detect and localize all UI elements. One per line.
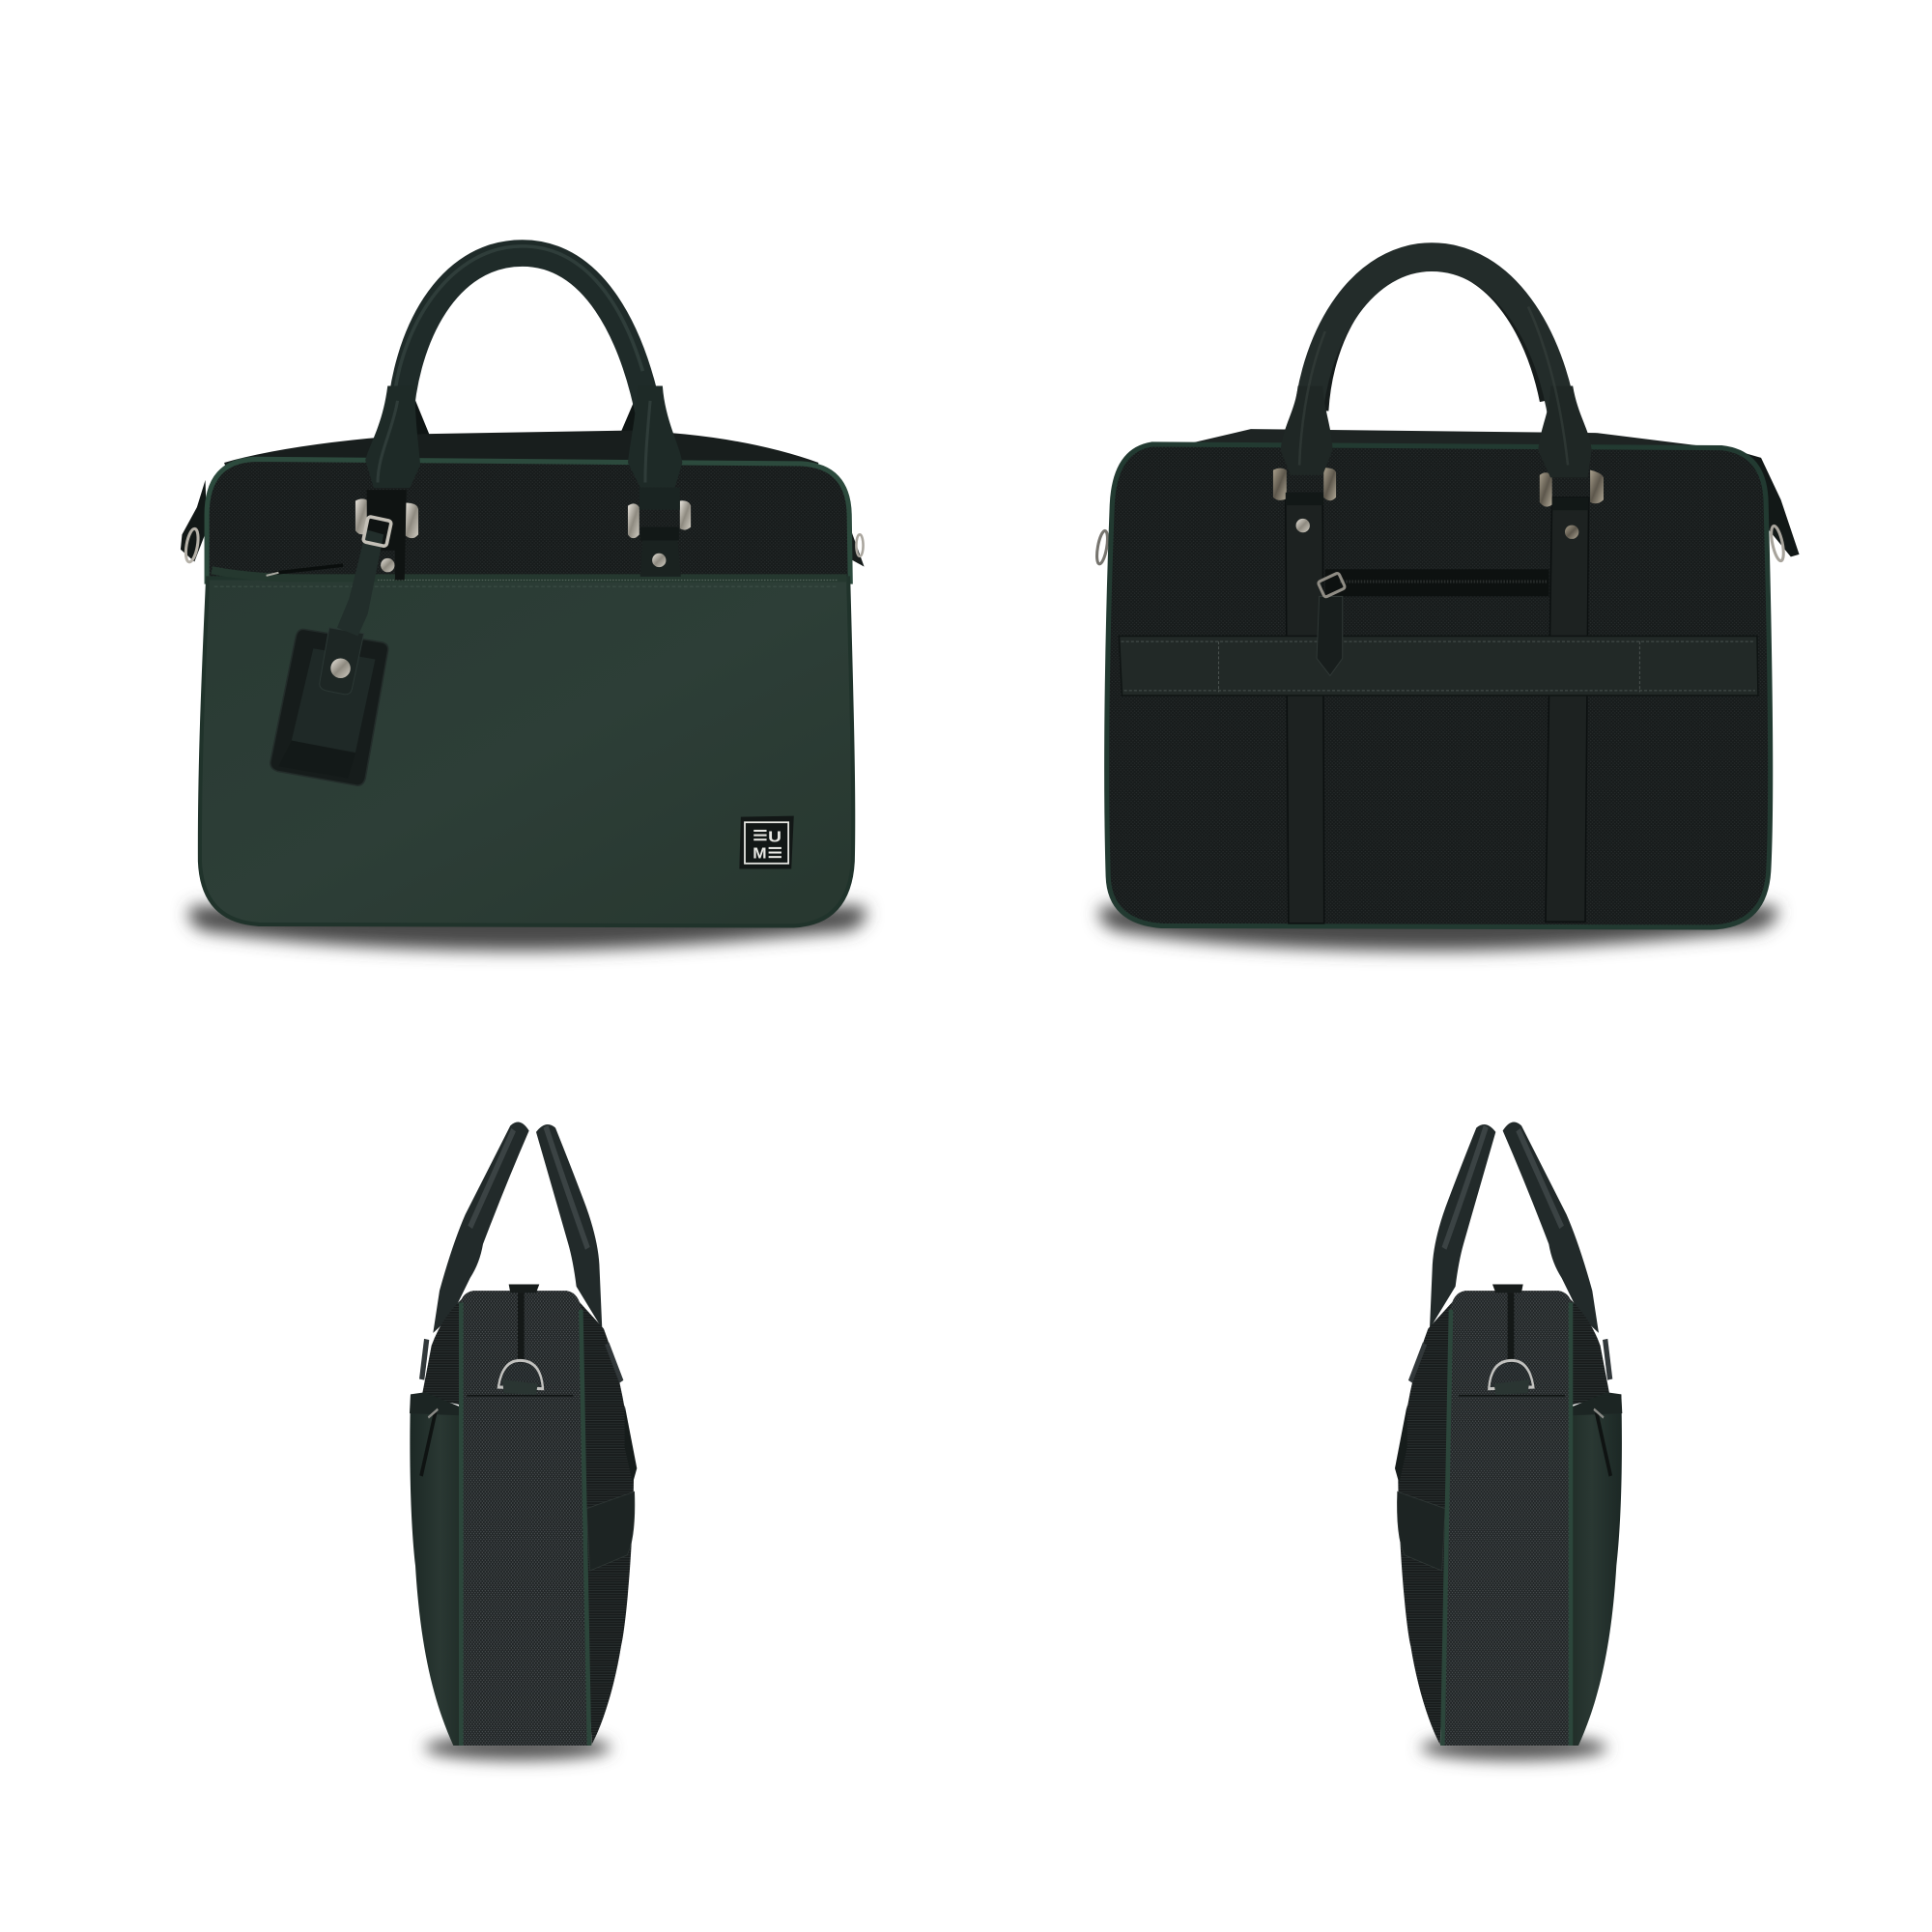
rear zipper pocket <box>1325 569 1549 596</box>
handles <box>433 1122 602 1333</box>
D-ring <box>498 1360 543 1395</box>
green piping <box>461 1302 589 1746</box>
brand badge: U <box>768 829 781 845</box>
top zip <box>467 1285 573 1396</box>
luggage tag <box>270 517 391 785</box>
brand badge <box>739 816 794 868</box>
main body <box>1107 444 1771 927</box>
handle rings and rivets <box>1273 468 1604 539</box>
ground shadow <box>189 906 866 951</box>
rear fabric gusset <box>1398 1292 1462 1745</box>
green piping <box>1442 1302 1571 1746</box>
ground shadow <box>1099 906 1777 951</box>
side strap loops and D-rings <box>181 480 865 567</box>
top zip <box>1459 1285 1565 1396</box>
brand badge: M <box>753 846 767 863</box>
upper fabric panel <box>207 459 850 582</box>
centre mesh panel <box>1442 1291 1572 1746</box>
rear fabric gusset <box>570 1292 634 1745</box>
handles <box>1430 1122 1599 1333</box>
rear strap band <box>586 1405 637 1571</box>
panel: back view of black laptop bag <box>1094 257 1800 951</box>
rear strap band <box>1395 1405 1445 1571</box>
front green leather pocket <box>410 1392 461 1746</box>
top gusset <box>224 431 818 490</box>
right handle straps and hardware <box>628 488 691 577</box>
rear handle <box>1322 265 1546 411</box>
lower green leather panel <box>200 578 853 925</box>
side zipper flap and D-rings <box>1094 453 1800 565</box>
D-ring <box>1489 1360 1533 1395</box>
horizontal trolley band <box>1119 636 1758 696</box>
panel: left side view of bag <box>410 1122 637 1760</box>
panel: front view of green laptop bag <box>181 246 866 951</box>
zipper and stitching <box>212 565 847 586</box>
zipper pull <box>1317 573 1346 675</box>
upper front gusset <box>422 1292 470 1405</box>
top gusset <box>1177 429 1717 460</box>
ground shadow <box>1421 1735 1607 1760</box>
main handle arc <box>365 246 682 488</box>
zip hardware <box>422 1339 621 1381</box>
left handle straps and hardware <box>355 490 418 580</box>
back straps <box>1286 495 1589 923</box>
centre mesh panel <box>460 1291 590 1746</box>
ground shadow <box>424 1735 611 1760</box>
upper front gusset <box>1562 1292 1610 1405</box>
front green leather pocket <box>1572 1392 1622 1746</box>
zip hardware <box>1410 1339 1610 1381</box>
panel: right side view of bag <box>1395 1122 1622 1760</box>
rear handle stubs <box>403 381 650 436</box>
main handle arc <box>1281 257 1592 477</box>
